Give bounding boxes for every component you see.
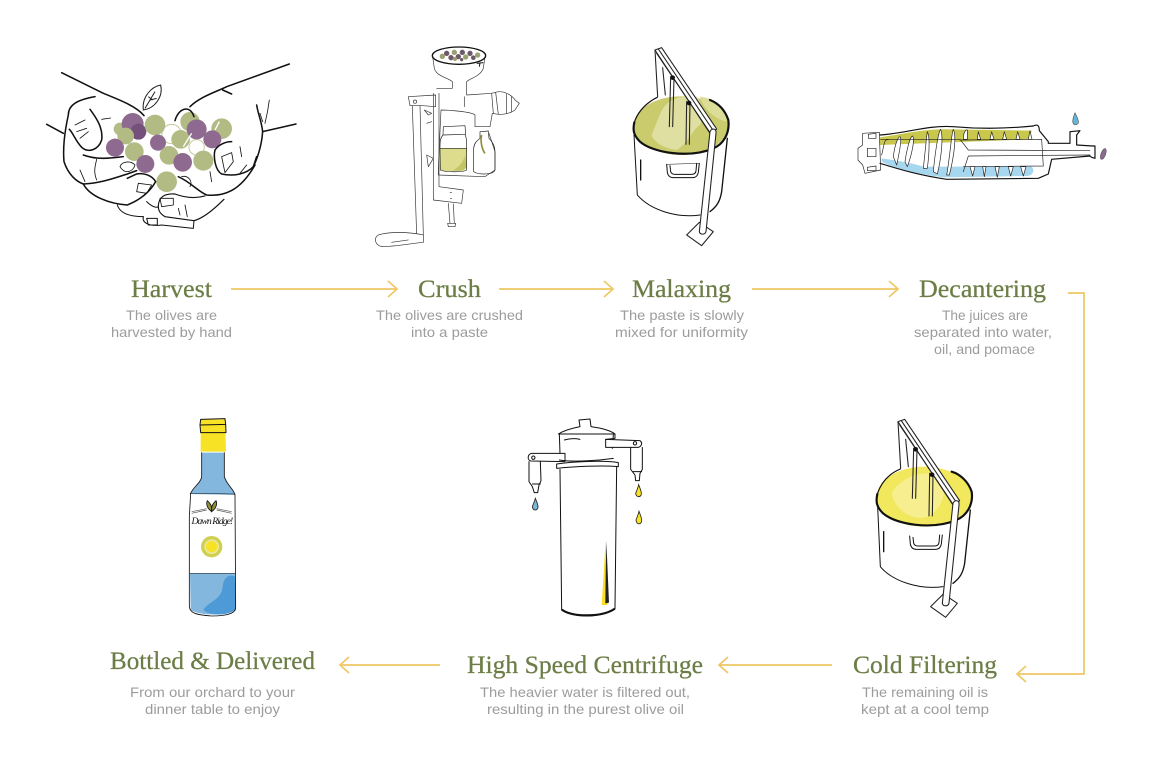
step 1 text: The olives are — [126, 308, 217, 323]
icon: decanter — [858, 113, 1107, 179]
arrow: crush to malaxing — [499, 281, 613, 297]
step 3 title: Malaxing: Malaxing — [632, 274, 731, 303]
icon: bottle: Dawn Ridge! — [190, 516, 233, 527]
bottle — [474, 131, 495, 174]
icon: centrifuge — [528, 419, 642, 616]
step 4 title: Decantering: Decantering — [919, 274, 1046, 303]
icon: bottle — [189, 419, 236, 616]
arrow: harvest to crush — [231, 281, 397, 297]
arrow: cold filtering to centrifuge — [719, 657, 832, 673]
step 3 text: mixed for uniformity — [615, 325, 748, 340]
step 7 text: From our orchard to your — [130, 685, 295, 700]
arrow: centrifuge to bottled — [340, 657, 440, 673]
step 6 title: High Speed Centrifuge: High Speed Centrifuge — [467, 650, 703, 679]
step 7 title: Bottled & Delivered: Bottled & Delivered — [110, 646, 315, 675]
icon: hands holding olives — [47, 64, 296, 228]
step 6 text: The heavier water is filtered out, — [480, 685, 690, 700]
arrow: malaxing to decantering — [752, 281, 898, 297]
step 4 text: separated into water, — [914, 325, 1052, 340]
stirring arm — [655, 48, 717, 246]
stirring arm — [898, 419, 960, 617]
step 5 text: kept at a cool temp — [861, 702, 989, 717]
step 6 text: resulting in the purest olive oil — [487, 702, 684, 717]
icon: malaxing pot — [634, 48, 729, 246]
clamp and frame — [375, 57, 519, 247]
oil surface — [877, 467, 972, 527]
step 2 text: into a paste — [411, 325, 488, 340]
label logo — [207, 501, 217, 512]
paste surface — [634, 96, 728, 155]
step 1 title: Harvest: Harvest — [131, 274, 212, 303]
step 2 text: The olives are crushed — [376, 308, 523, 323]
step 5 text: The remaining oil is — [862, 685, 988, 700]
olives — [106, 112, 232, 192]
step 5 title: Cold Filtering: Cold Filtering — [853, 650, 997, 679]
step 2 title: Crush: Crush — [418, 274, 481, 303]
step 3 text: The paste is slowly — [620, 308, 744, 323]
arrow: decantering down to cold filtering — [1017, 293, 1084, 682]
step 1 text: harvested by hand — [111, 325, 232, 340]
jar — [440, 148, 467, 171]
icon: olive crusher — [375, 47, 519, 247]
step 4 text: The juices are — [942, 308, 1028, 323]
hopper — [432, 47, 486, 64]
icon: cold filtering pot — [877, 419, 972, 617]
step 4 text: oil, and pomace — [934, 342, 1035, 357]
step 7 text: dinner table to enjoy — [145, 702, 280, 717]
